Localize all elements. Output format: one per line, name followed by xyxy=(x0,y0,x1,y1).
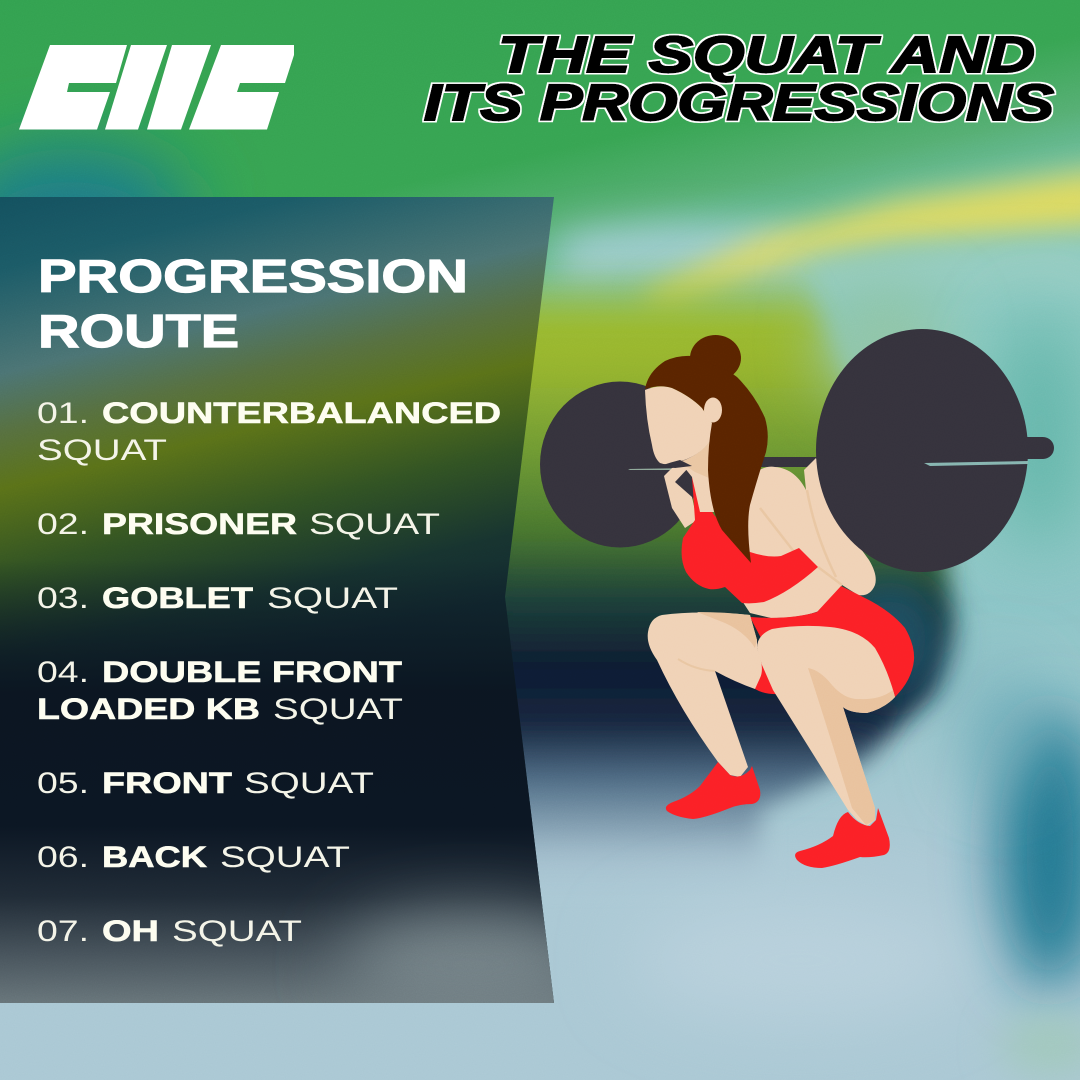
back leg thigh shadow xyxy=(697,612,757,648)
step 01 xyxy=(37,397,501,467)
step 06: BACK xyxy=(102,841,207,874)
step 03 xyxy=(37,582,398,615)
step 02 xyxy=(37,508,440,541)
illustration: woman squatting with barbell xyxy=(540,329,1054,868)
logo xyxy=(19,45,294,130)
torso creases xyxy=(760,490,842,585)
step 07: SQUAT xyxy=(172,915,302,948)
heading: progression route: ROUTE xyxy=(38,305,239,357)
step 06 xyxy=(37,841,350,874)
face xyxy=(645,386,712,464)
chin shadow under jaw xyxy=(663,460,692,468)
step 05: FRONT xyxy=(102,767,232,800)
plate highlight left xyxy=(628,468,692,470)
step 05: 05. xyxy=(37,767,89,800)
heading: progression route: PROGRESSION xyxy=(38,250,468,302)
neck shadow xyxy=(680,440,711,478)
step 07: OH xyxy=(102,915,159,948)
back leg crease xyxy=(678,659,715,671)
left shoe xyxy=(666,762,760,819)
step 03: SQUAT xyxy=(267,582,398,615)
neck xyxy=(680,440,714,512)
step 03: 03. xyxy=(37,582,89,615)
step 01: COUNTERBALANCED xyxy=(102,397,501,430)
step 05 xyxy=(37,767,374,800)
step 07: 07. xyxy=(37,915,89,948)
left weight plate xyxy=(540,382,700,548)
red sports bra xyxy=(682,477,818,603)
step 02: 02. xyxy=(37,508,89,541)
hand near face xyxy=(664,466,697,528)
plate highlight right xyxy=(924,461,1028,466)
front leg xyxy=(757,626,895,826)
barbell shaft xyxy=(690,457,820,467)
hair xyxy=(645,356,768,563)
step 04: DOUBLE FRONT xyxy=(102,656,402,689)
hair bun xyxy=(690,335,741,381)
step 02: PRISONER xyxy=(102,508,297,541)
step 05: SQUAT xyxy=(244,767,374,800)
right weight plate xyxy=(816,329,1028,572)
shorts xyxy=(750,586,914,697)
title xyxy=(424,26,1054,131)
right shoe xyxy=(795,808,890,868)
front leg shadow xyxy=(808,668,895,825)
step 02: SQUAT xyxy=(309,508,440,541)
step 07 xyxy=(37,915,302,948)
step 06: 06. xyxy=(37,841,89,874)
step 06: SQUAT xyxy=(220,841,350,874)
step 04: LOADED KB xyxy=(37,693,260,726)
step 04: SQUAT xyxy=(273,693,403,726)
torso and arm xyxy=(735,458,876,618)
barbell end sleeve xyxy=(1026,437,1054,459)
back leg xyxy=(648,612,762,777)
step 01: SQUAT xyxy=(37,434,167,467)
heading: progression route xyxy=(38,250,468,357)
title: THE SQUAT AND xyxy=(498,26,1035,83)
step 03: GOBLET xyxy=(102,582,253,615)
list: progression steps xyxy=(37,397,501,948)
panel: progression route xyxy=(0,190,600,1015)
step 01: 01. xyxy=(37,397,89,430)
step 04 xyxy=(37,656,403,726)
ear xyxy=(704,398,722,422)
title: ITS PROGRESSIONS xyxy=(424,74,1054,131)
step 04: 04. xyxy=(37,656,89,689)
